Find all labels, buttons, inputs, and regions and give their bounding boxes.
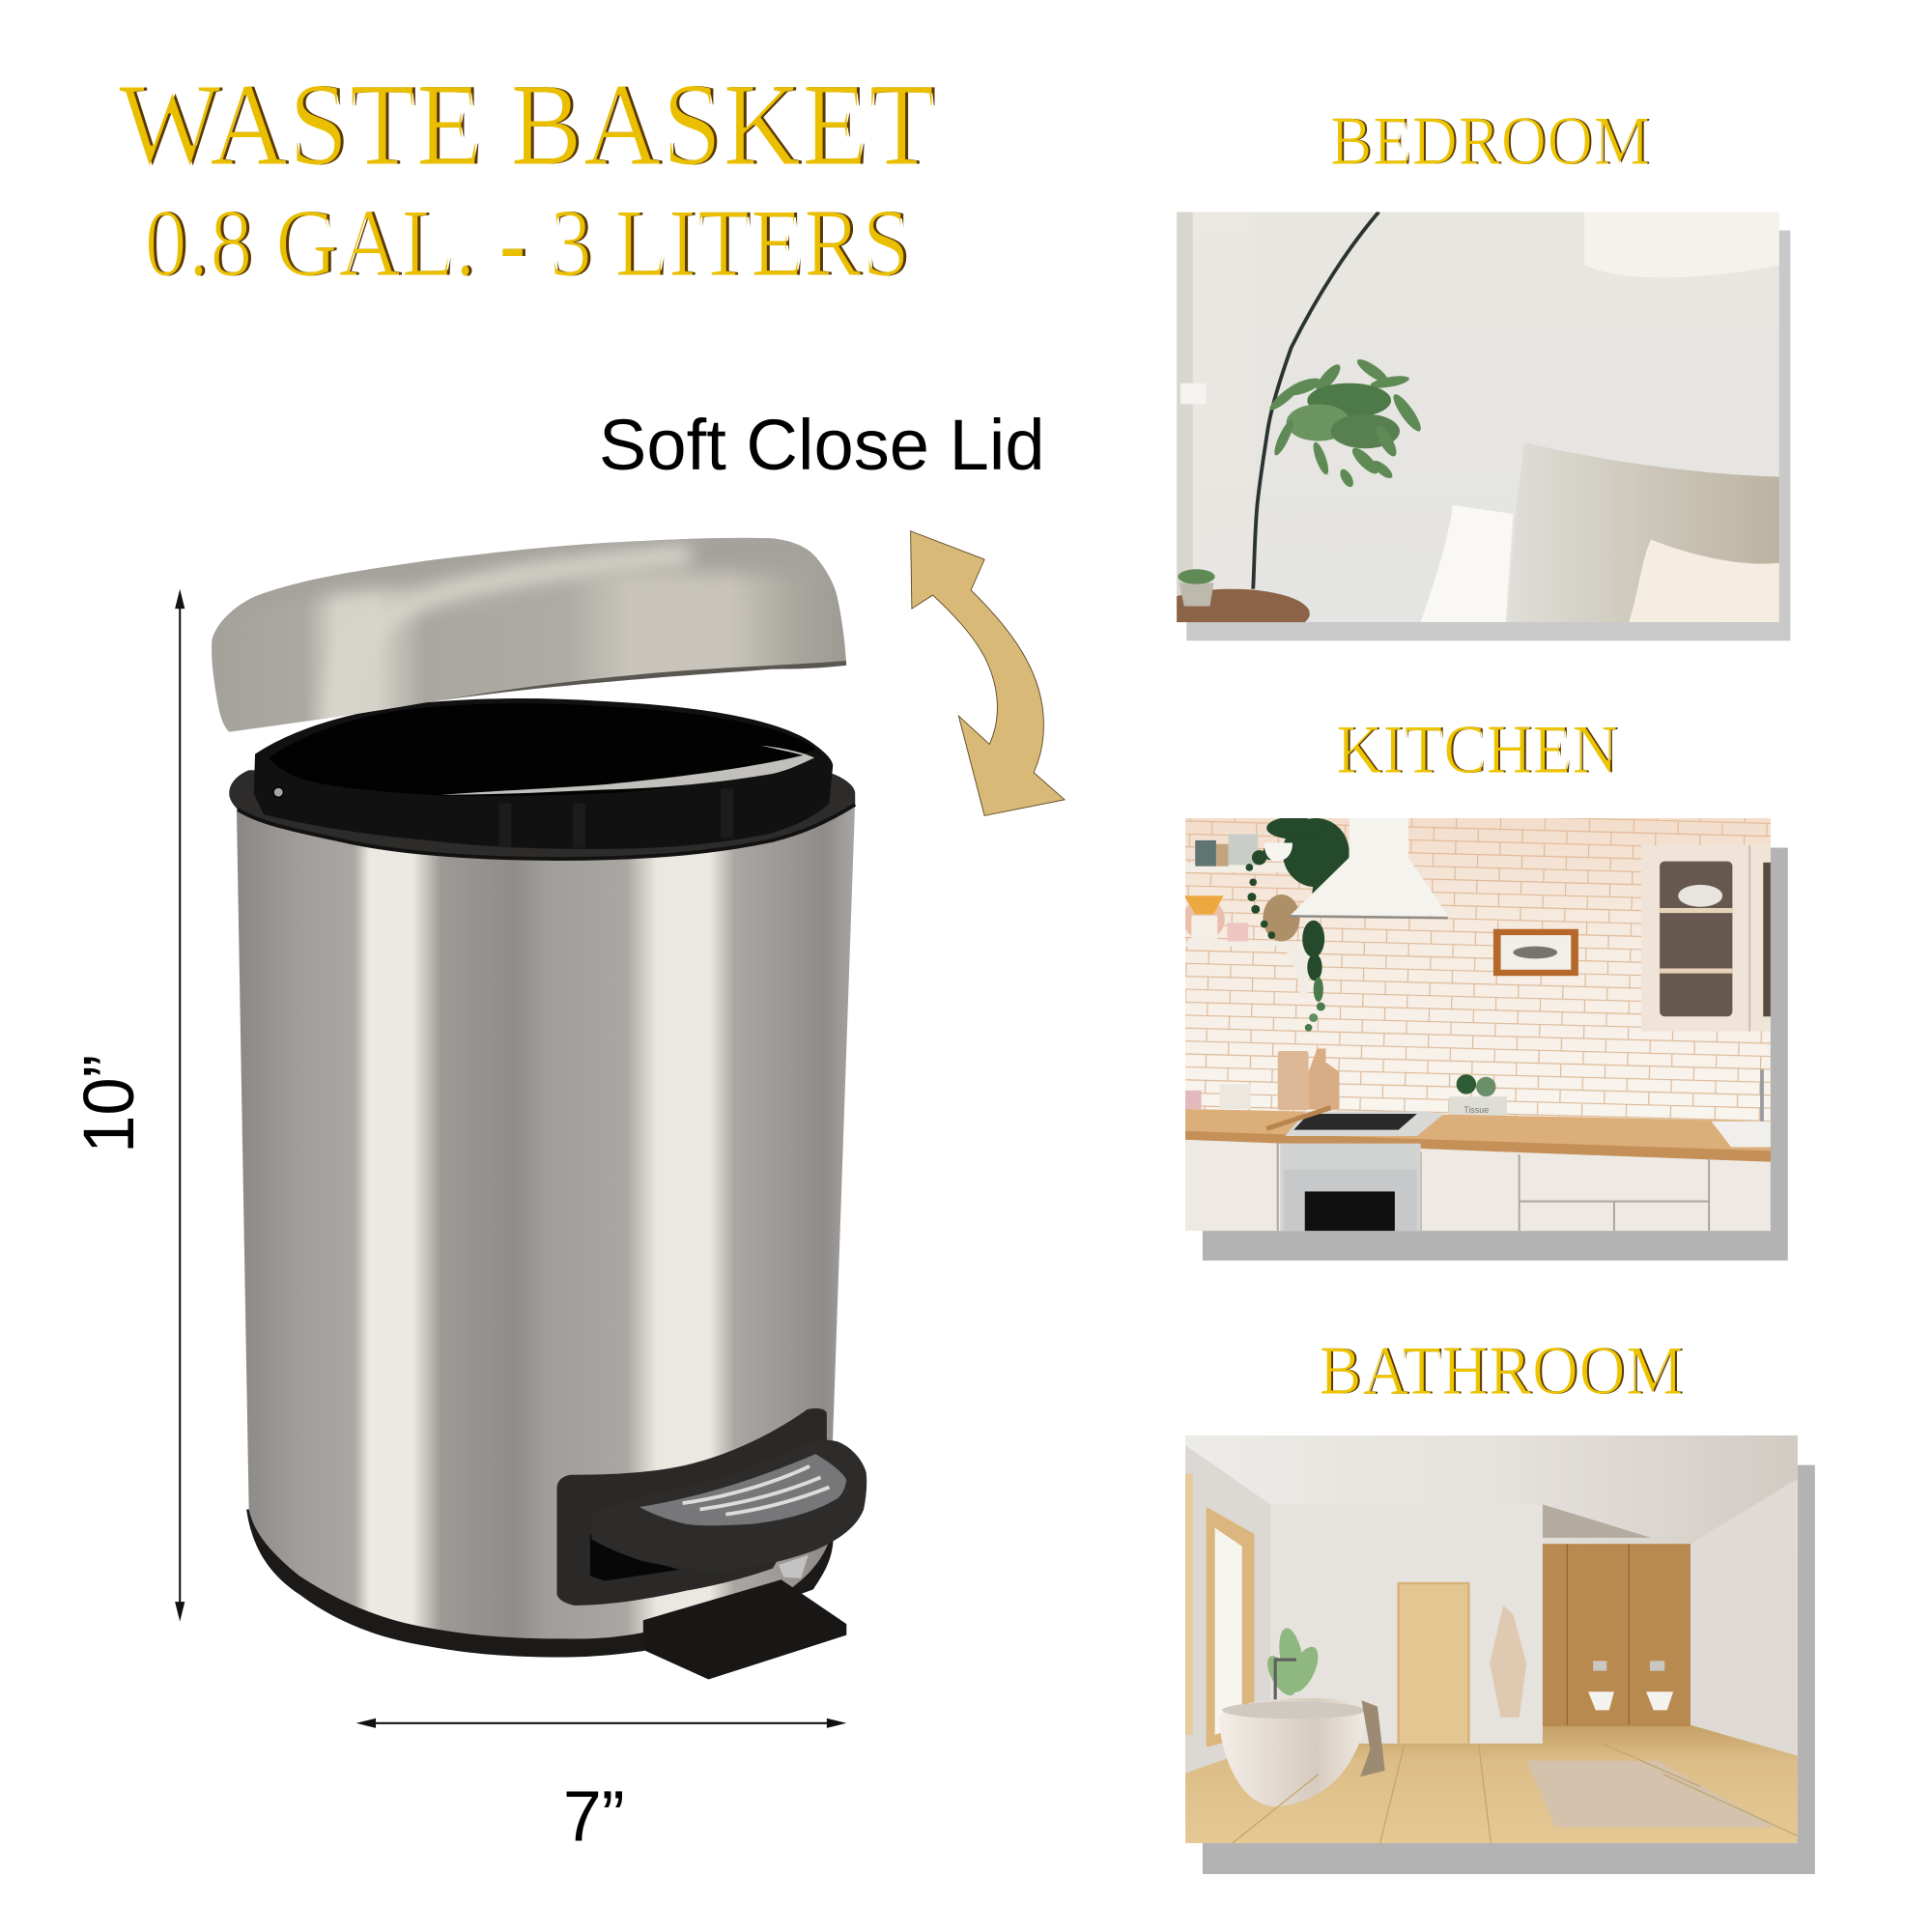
inner liner reflection: [441, 746, 814, 795]
oven: [1280, 1144, 1421, 1231]
pedal frame: [557, 1408, 827, 1605]
hanging ivy: [1246, 817, 1350, 1032]
back pillow: [1507, 442, 1779, 622]
draped towel: [1360, 1700, 1385, 1776]
lid underside: [440, 661, 846, 701]
shelf lower edge: [238, 805, 855, 859]
lid swoop highlight: [335, 554, 690, 739]
photo shadow: kitchen: [1203, 848, 1788, 1261]
floor: [1185, 1725, 1798, 1843]
callout: soft close lid: Soft Close Lid: [599, 405, 1045, 485]
potted succulent: [1179, 582, 1213, 607]
photo: kitchen: [1182, 817, 1771, 1231]
lid: [212, 537, 846, 732]
pedal cut-out: [590, 1534, 679, 1580]
hanging plant: [1266, 355, 1425, 489]
countertop: [1185, 1109, 1771, 1162]
flush plates: [1593, 1661, 1664, 1671]
baskets: [1263, 895, 1300, 941]
pedal lever: [591, 1440, 867, 1570]
title: Waste Basket: WASTE BASKET: [120, 61, 936, 190]
lamp shade: [1584, 212, 1779, 277]
ceiling: [1185, 1435, 1798, 1547]
heading: bedroom: BEDROOM: [1331, 103, 1651, 180]
left wall: [1185, 1445, 1270, 1773]
inner ring: [254, 698, 833, 849]
heading: bathroom: BATHROOM: [1320, 1333, 1685, 1409]
door: [1397, 1582, 1470, 1744]
lower cabinets: [1185, 1140, 1771, 1231]
fluffy cushion: [1629, 540, 1779, 622]
wall switch: [1180, 384, 1207, 404]
photo: bathroom: [1185, 1435, 1798, 1843]
lamp pole: [1253, 212, 1378, 589]
towel: [1490, 1605, 1526, 1718]
dimension: width label: 7”: [563, 1776, 625, 1857]
plant: [1262, 1626, 1324, 1700]
dimension: width arrow: [356, 1719, 846, 1728]
side table: [1177, 589, 1310, 622]
white pillow: [1421, 505, 1513, 622]
recess ceiling and wood wall: [1543, 1504, 1651, 1538]
photo: kitchen: Tissue: [1463, 1105, 1489, 1115]
photo shadow: bathroom: [1203, 1465, 1815, 1874]
floor planks: [1233, 1744, 1798, 1843]
pedal mechanism: [779, 1555, 809, 1578]
icon: curved double arrow: [911, 531, 1065, 815]
photo shadow: bedroom: [1186, 231, 1790, 640]
right wall: [1690, 1479, 1798, 1756]
cutting boards: [1278, 1051, 1309, 1110]
bin base: [246, 1509, 838, 1658]
dimension: height arrow: [175, 589, 185, 1622]
faucet: [1275, 1660, 1296, 1703]
subtitle: capacity: 0.8 GAL. - 3 LITERS: [146, 190, 912, 296]
heading: kitchen: KITCHEN: [1337, 712, 1619, 788]
opening: [269, 703, 815, 796]
photo: bedroom: [1154, 212, 1779, 639]
wall toilets: [1588, 1691, 1673, 1710]
product: stainless steel waste basket: [197, 524, 867, 1680]
rim shelf: [229, 770, 855, 859]
jars: [1185, 1091, 1202, 1109]
rolling pins: [1266, 1108, 1331, 1128]
warm wall glow: [1193, 212, 1254, 622]
gas hob: [1285, 1112, 1444, 1136]
bathtub: [1218, 1698, 1368, 1806]
framed picture: [1493, 929, 1578, 976]
bracket: [1283, 941, 1309, 998]
lid crown shading: [217, 537, 829, 628]
shelf items: [1195, 840, 1216, 867]
sink: [1712, 1122, 1771, 1148]
rug: [1526, 1761, 1776, 1828]
back wall: [1270, 1504, 1543, 1744]
pedal tread: [639, 1454, 846, 1525]
pedal foot plate: [643, 1579, 846, 1680]
range hood: [1290, 818, 1448, 916]
tread stripes: [683, 1466, 829, 1515]
faucet: [1760, 1069, 1763, 1122]
window: [1207, 1507, 1254, 1747]
white bowl: [1264, 842, 1293, 862]
bin body: [237, 801, 855, 1639]
wall cabinet: [1641, 845, 1771, 1032]
wall shelves: [1185, 863, 1306, 947]
tissue box and plants: [1457, 1074, 1476, 1094]
rivet: [273, 787, 283, 797]
dimension: height label: 10”: [69, 1055, 149, 1153]
ring highlights: [505, 788, 727, 848]
